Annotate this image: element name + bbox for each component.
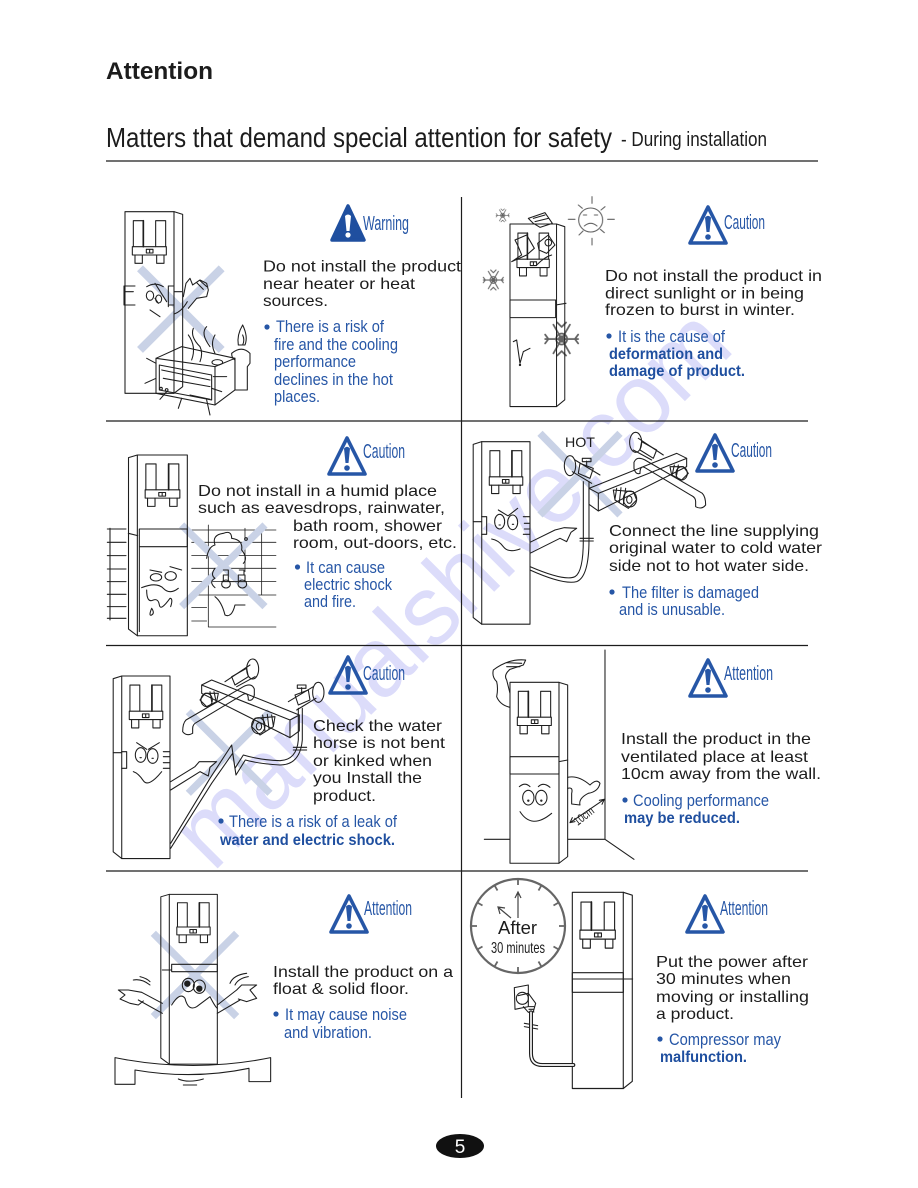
label: HOT: HOT	[565, 434, 595, 450]
note	[273, 1006, 407, 1042]
illustration: dispenser in humid bathroom	[107, 455, 276, 636]
label: attention: Attention	[364, 898, 412, 920]
illustration: dispenser in sun and snow	[483, 197, 614, 407]
instruction text: a product.	[656, 1006, 734, 1023]
icon: caution triangle	[690, 207, 726, 243]
instruction text: or kinked when	[313, 753, 432, 770]
instruction text	[621, 731, 821, 783]
note	[295, 559, 393, 611]
note: declines in the hot	[274, 371, 393, 389]
illustration: dispenser 10cm from wall	[484, 650, 634, 863]
section heading: - During installation	[621, 129, 767, 151]
instruction text	[273, 964, 453, 998]
instruction text	[198, 483, 457, 552]
note: damage of product.	[609, 363, 745, 380]
label: caution: Caution	[731, 440, 772, 462]
instruction text	[605, 268, 822, 319]
panel: humid place caution	[107, 438, 457, 636]
instruction text: near heater or heat	[263, 276, 416, 293]
panel: power delay attention	[471, 879, 809, 1089]
label: attention: Attention	[724, 663, 773, 685]
instruction text: moving or installing	[656, 989, 809, 1006]
note: places.	[274, 388, 320, 406]
instruction text: side not to hot water side.	[609, 558, 809, 575]
label: caution: Caution	[363, 663, 405, 685]
panel: solid floor attention	[115, 894, 453, 1085]
icon: attention triangle	[690, 660, 726, 696]
note: electric shock	[304, 576, 393, 594]
label: caution: Caution	[363, 441, 405, 463]
instruction text: sources.	[263, 293, 328, 310]
instruction text: direct sunlight or in being	[605, 286, 804, 302]
panel: ventilation attention	[484, 650, 821, 863]
note: and vibration.	[284, 1024, 372, 1042]
instruction text: Put the power after	[656, 954, 809, 971]
instruction text: Do not install the product	[263, 258, 462, 276]
illustration: dispenser near heater	[124, 212, 250, 415]
instruction text: frozen to burst in winter.	[605, 302, 795, 319]
instruction text: product.	[313, 788, 376, 805]
section heading: Matters that demand special attention for safety	[106, 122, 612, 153]
instruction text	[609, 523, 823, 575]
note: water and electric shock.	[219, 832, 395, 849]
instruction text: 30 minutes when	[656, 971, 791, 988]
instruction text: such as eavesdrops, rainwater,	[198, 500, 445, 517]
instruction text: 10cm away from the wall.	[621, 766, 821, 783]
instruction text: float & solid floor.	[273, 981, 409, 998]
note	[264, 318, 398, 406]
instruction text: original water to cold water	[609, 540, 823, 557]
note	[609, 584, 759, 619]
note: Cooling performance	[633, 792, 769, 810]
illustration: dispenser with power plug	[514, 892, 633, 1089]
illustration: dispenser 10cm from wall: 10cm	[571, 804, 597, 828]
page number: 5	[455, 1137, 465, 1158]
illustration: dispenser connected to hot tap	[473, 432, 706, 624]
illustration: dispenser with kinked hose	[113, 659, 324, 859]
note: and fire.	[304, 593, 356, 611]
note: deformation and	[609, 346, 723, 363]
icon: clock showing after 30 minutes	[471, 879, 565, 973]
panel: sunlight and freezing caution	[483, 197, 822, 407]
illustration: dispenser on uneven floor	[115, 894, 271, 1085]
instruction text: Install the product on a	[273, 964, 453, 981]
note	[657, 1031, 782, 1066]
icon: caution triangle	[697, 435, 733, 471]
icon: warning triangle	[332, 206, 364, 240]
icon: caution triangle	[329, 438, 365, 474]
note	[218, 813, 397, 849]
label: attention: Attention	[720, 898, 768, 920]
instruction text: Check the water	[313, 718, 443, 735]
note: It may cause noise	[285, 1006, 407, 1024]
instruction text	[263, 258, 462, 310]
instruction text: Connect the line supplying	[609, 523, 819, 540]
note: There is a risk of a leak of	[229, 813, 397, 831]
icon: attention triangle	[331, 896, 367, 932]
instruction text: Do not install the product in	[605, 268, 822, 285]
note: malfunction.	[660, 1049, 747, 1066]
note: It is the cause of	[618, 328, 725, 346]
note	[622, 792, 769, 827]
panel: kinked hose caution	[113, 657, 446, 859]
panel: water line caution	[473, 432, 823, 624]
label: caution: Caution	[724, 212, 765, 234]
note: There is a risk of	[276, 318, 384, 336]
icon: clock showing after 30 minutes: 30 minutes	[491, 940, 545, 957]
note: may be reduced.	[624, 810, 740, 827]
instruction text: bath room, shower	[293, 518, 443, 535]
instruction text	[656, 954, 809, 1023]
page number	[436, 1134, 484, 1158]
label: warning: Warning	[363, 213, 409, 235]
instruction text: Do not install in a humid place	[198, 483, 437, 500]
note: The filter is damaged	[622, 584, 759, 602]
icon: caution triangle	[330, 657, 366, 693]
instruction text: Install the product in the	[621, 731, 811, 748]
icon: attention triangle	[687, 896, 723, 932]
instruction text: room, out-doors, etc.	[293, 535, 457, 552]
instruction text: horse is not bent	[313, 735, 446, 752]
instruction text: you Install the	[313, 770, 422, 787]
icon: clock showing after 30 minutes: After	[498, 918, 537, 938]
note: performance	[274, 353, 356, 371]
note: Compressor may	[669, 1031, 782, 1049]
note: and is unusable.	[619, 601, 725, 619]
panel: heater warning	[124, 206, 462, 415]
watermark: manualshive.com	[149, 286, 752, 889]
note: fire and the cooling	[274, 336, 398, 354]
instruction text: ventilated place at least	[621, 749, 809, 766]
note: It can cause	[306, 559, 385, 577]
note	[606, 328, 745, 380]
instruction text	[313, 718, 446, 805]
title: Attention	[106, 58, 213, 85]
